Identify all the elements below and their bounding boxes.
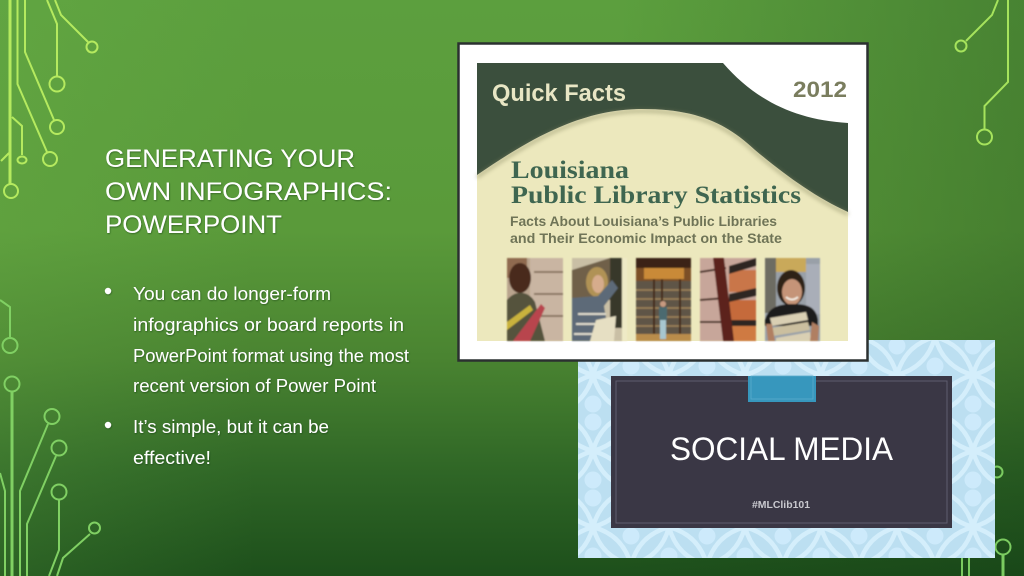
bullet: first point <box>105 284 409 396</box>
cover subtitle: Facts About Louisiana’s Public Libraries <box>510 213 777 229</box>
cover background <box>477 109 848 341</box>
cover title: Louisiana <box>511 157 630 184</box>
bullet: first point: You can do longer-form <box>133 284 331 304</box>
title <box>105 145 392 239</box>
circuit decoration: top left <box>1 0 98 198</box>
bullet list <box>105 284 409 468</box>
year: 2012 <box>793 77 847 102</box>
slide thumbnail: social media <box>578 340 995 558</box>
cover subtitle: and Their Economic Impact on the State <box>510 230 782 246</box>
cover title <box>511 157 801 209</box>
photo 3: library hall <box>636 258 691 341</box>
circuit decoration: top right <box>956 0 1008 144</box>
bullet: second point <box>105 417 329 468</box>
frame <box>458 44 868 360</box>
photo 2: woman at shelf <box>572 258 627 341</box>
circuit decoration: bottom right <box>962 466 1010 576</box>
bullet: second point: effective! <box>133 448 211 468</box>
circuit decoration: bottom left <box>0 300 100 576</box>
framed image: Louisiana quick facts cover <box>458 44 868 360</box>
bullet: second point: It’s simple, but it can be <box>133 417 329 437</box>
patterned blue background <box>578 340 995 558</box>
Quick Facts label: Quick Facts <box>492 80 626 107</box>
blue tab <box>748 376 816 402</box>
dark title panel <box>611 376 952 528</box>
bullet: first point: recent version of Power Point <box>133 376 376 396</box>
photo 5: smiling woman with books <box>765 258 820 341</box>
title: GENERATING YOUR <box>105 145 355 173</box>
photo strip <box>507 258 820 341</box>
cover subtitle <box>510 213 782 246</box>
photo 1: man with book <box>507 258 563 341</box>
slide hashtag: #MLClib101 <box>752 500 810 511</box>
title: OWN INFOGRAPHICS: <box>105 178 392 206</box>
bullet: first point: PowerPoint format using the most <box>133 346 409 366</box>
slide heading: SOCIAL MEDIA <box>670 431 894 467</box>
cover title: Public Library Statistics <box>511 182 801 209</box>
photo 4: book stacks <box>700 258 756 341</box>
dark green wave <box>477 63 848 212</box>
title: POWERPOINT <box>105 211 282 239</box>
bullet: first point: infographics or board reports in <box>133 315 404 335</box>
